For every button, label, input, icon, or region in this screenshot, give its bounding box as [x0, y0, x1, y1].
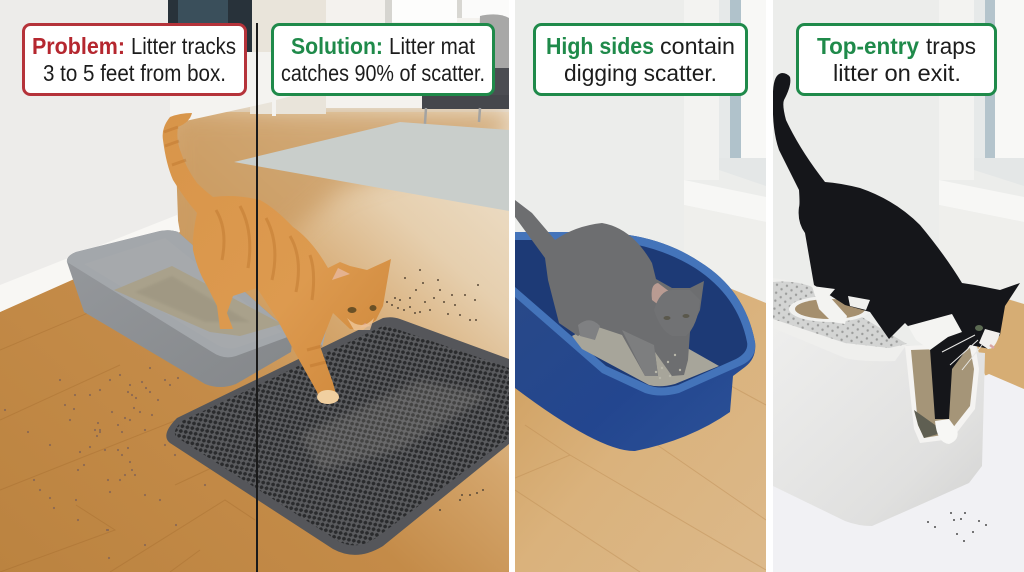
grey cat [515, 200, 704, 376]
floor [0, 112, 509, 572]
white floor mat [773, 374, 1024, 572]
panel: top-entry scene [773, 0, 1024, 572]
divider line [256, 23, 258, 572]
callout: solution: catches 90% of scatter. [281, 60, 485, 86]
callout: high sides: contain [660, 33, 735, 59]
window [684, 0, 766, 222]
white top-entry box [773, 278, 985, 526]
white front leg [812, 286, 847, 324]
callout: solution [272, 24, 494, 94]
callout: top-entry: litter on exit. [833, 60, 961, 86]
scatter near mat [387, 270, 483, 510]
rug [234, 122, 509, 211]
back floor shade [178, 107, 509, 233]
paw [317, 390, 339, 404]
floor grain [0, 314, 255, 572]
wall [515, 0, 766, 252]
stripes [164, 127, 326, 366]
litter in box [114, 266, 282, 336]
back wall pillar [250, 100, 326, 114]
callout: problem: Litter tracks [131, 33, 236, 59]
scatter on white mat [928, 513, 986, 541]
black body [773, 73, 1020, 419]
white belly patch [848, 296, 870, 310]
callout: high sides: digging scatter. [564, 60, 717, 86]
floor planks [515, 380, 766, 572]
callout: top-entry [798, 24, 996, 94]
scatter on floor [5, 368, 205, 558]
sofa [422, 14, 509, 124]
callout: problem: 3 to 5 feet from box. [43, 60, 226, 86]
digging litter [656, 355, 680, 378]
black and white cat [773, 73, 1020, 444]
floor [515, 272, 766, 572]
wood floor [977, 300, 1024, 389]
lid hole [789, 296, 871, 322]
grey cat face [652, 283, 698, 332]
orange cat [163, 113, 391, 404]
callout: solution: Litter mat [389, 33, 476, 59]
box lid [886, 345, 904, 361]
litter in box [572, 322, 719, 386]
blue litter box [515, 232, 755, 451]
callout: problem [24, 24, 246, 94]
cat face [332, 268, 376, 330]
tail and body [163, 113, 391, 403]
litter mat [166, 317, 509, 555]
entry opening [905, 343, 979, 443]
grey litter box [67, 230, 328, 387]
panel: problem and solution scene [0, 0, 509, 572]
window [939, 0, 1024, 222]
callout: high sides [534, 24, 746, 94]
white paw [935, 419, 958, 444]
callout: problem: Problem: [32, 33, 125, 59]
callout: top-entry: traps [926, 33, 976, 59]
panel: high sides scene [515, 0, 766, 572]
callout: top-entry: Top-entry [817, 33, 919, 59]
white console [170, 52, 292, 124]
windows [326, 0, 509, 108]
tv [168, 0, 252, 52]
room wall [228, 107, 509, 112]
cat face [942, 325, 1000, 370]
wall [773, 0, 1024, 400]
white chest [908, 314, 962, 350]
callout: solution: Solution: [291, 33, 383, 59]
left wall [0, 0, 178, 312]
baseboard [0, 215, 180, 312]
callout: high sides: High sides [546, 33, 654, 59]
